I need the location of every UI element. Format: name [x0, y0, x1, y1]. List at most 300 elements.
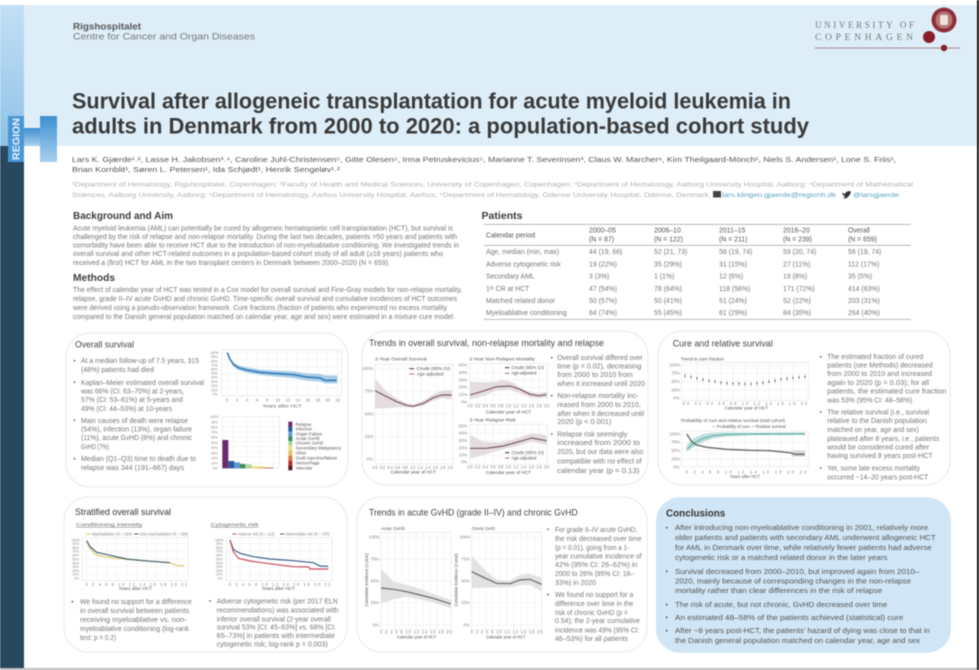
institution name: [73, 22, 255, 42]
patients table: 59 (20, 74): [783, 249, 816, 256]
institution name: Centre for Cancer and Organ Diseases: [73, 32, 255, 42]
text block: GvHD findings: 2000 to 26% (95% CI: 18–: [555, 571, 634, 578]
logo: Region H: REGION: [12, 118, 22, 160]
text block: cytogenetic finding: inferior overall survival (2-year overall: [217, 616, 331, 624]
patients table: 118 (56%): [719, 286, 750, 293]
text block: GvHD findings: We found no support for a: [555, 592, 633, 599]
text block: overall survival findings: was 66% (CI: 63–70%) at 2-years,: [80, 388, 184, 396]
chart: 3-year relapse risk: 30%: [459, 438, 467, 443]
chart: 3-year relapse risk: 0%: [461, 460, 467, 465]
chart: 2-year overall survival: 0%: [367, 457, 373, 462]
text block: GvHD findings: [547, 527, 642, 643]
chart: cytogenetic risk: 70%: [216, 550, 223, 554]
text block: cytogenetic finding: survival 53% [CI: 45–63%] vs. 68% [CI:: [217, 624, 336, 632]
text block: cytogenetic finding: cytogenetic risk; log-rank p = 0.003): [217, 642, 328, 648]
patients table: 2011–15: [719, 228, 745, 234]
chart: 3-year relapse risk: 40%: [459, 431, 467, 436]
chart: conditioning intensity: 30%: [72, 565, 79, 569]
logo: University of Copenhagen: COPENHAGEN: [815, 33, 913, 43]
patients table: 56 (19, 74): [848, 249, 881, 256]
chart: probability of cure and relative survival: 0%: [673, 464, 680, 469]
chart: conditioning intensity: 50%: [72, 557, 79, 561]
text block: overall survival findings: Kaplan–Meier estimated overall survival: [81, 380, 204, 387]
chart: conditioning intensity: 10%: [72, 573, 79, 577]
patients table: Overall: [848, 228, 870, 234]
patients table: 52 (21, 73): [654, 249, 687, 256]
chart: cytogenetic risk: Adverse risk (N = 112): [238, 531, 275, 536]
authors: [72, 155, 896, 174]
chart: cytogenetic risk: 30%: [216, 565, 223, 569]
patients table: 12 (6%): [719, 274, 743, 280]
text block: trend findings: [551, 355, 645, 475]
text block: overall survival findings: 49% (CI: 44–53%) at 10-years: [81, 406, 173, 413]
chart: 2-year non-relapse mortality: 50%: [459, 363, 467, 368]
chart: probability of cure and relative survival: 25%: [671, 456, 680, 461]
chart: probability of cure and relative survival: [669, 418, 808, 479]
patients table: 47 (54%): [589, 286, 617, 293]
chart: 3-year relapse risk: 10%: [459, 453, 467, 458]
text block: trend findings: compatible with no effect of: [557, 458, 642, 466]
patients table: Calendar period: [486, 232, 535, 240]
chart: chronic GvHD: 50%: [461, 578, 470, 583]
text block: GvHD findings: the risk decreased over time: [555, 536, 642, 543]
text block: overall survival findings: At a median follow-up of 7.5 years, 315: [81, 358, 199, 365]
chart: chronic GvHD: 75%: [461, 556, 470, 561]
chart: 2-year overall survival: [362, 357, 454, 475]
panel: trends in GvHD: [357, 497, 647, 652]
background and aim: Background and Aim: [73, 211, 173, 222]
text block: conditioning finding: [71, 599, 192, 642]
text block: GvHD findings: 42% (95% CI: 26–62%) in: [555, 562, 637, 569]
text block: trend findings: reased from 2000 to 2010,: [557, 402, 641, 409]
text block: cytogenetic finding: Adverse cytogenetic risk (per 2017 ELN: [217, 598, 338, 606]
patients table: 414 (63%): [848, 286, 880, 293]
chart: 2-year non-relapse mortality: Calendar year of HCT: [486, 409, 531, 414]
chart: Kaplan-Meier overall survival: 70%: [211, 363, 218, 367]
text block: cure findings: occurred ~14–20 years post-HCT: [827, 474, 929, 482]
patients table: 55 (45%): [654, 310, 682, 317]
text block: conclusions: cytogenetic risk or a matched related donor in the later years: [675, 555, 888, 562]
heading: trends in survival: Trends in overall survival, non-relapse mortality and relapse: [369, 338, 604, 349]
chart: Kaplan-Meier overall survival: 8: [266, 398, 269, 403]
chart: cytogenetic risk: 50%: [216, 557, 223, 561]
chart: trend in cure fraction: Trend in cure fraction: [681, 357, 725, 362]
patients table: 84 (35%): [783, 310, 811, 317]
chart: chronic GvHD: Cumulative incidence (2-year): [453, 553, 458, 607]
patients table: 64 (74%): [589, 310, 617, 317]
chart: 3-year relapse risk: Calendar year of HCT: [486, 470, 531, 475]
chart: trend in cure fraction: 0%: [673, 395, 680, 400]
methods: [72, 273, 462, 321]
chart: 2-year overall survival: Calendar year of HCT: [391, 470, 436, 475]
chart: Kaplan-Meier overall survival: [210, 350, 342, 408]
patients table: 58 (19, 74): [719, 249, 752, 256]
text block: conclusions: for AML in Denmark over time, while relatively fewer patients had adverse: [675, 545, 932, 552]
chart: Kaplan-Meier overall survival: 4: [246, 398, 249, 403]
chart: 2-year overall survival: 75%: [365, 389, 373, 394]
background and aim: Acute myeloid leukemia (AML) can potentially be cured by allogeneic hematopoietic cell transplantation (HCT), but survival is: [73, 226, 454, 232]
chart: cytogenetic risk: 80%: [216, 546, 223, 550]
text block: trend findings: time (p = 0.02), decreasing: [557, 364, 641, 370]
text block: trend findings: Relapse risk seemingly: [557, 432, 628, 438]
chart: trend in cure fraction: Calendar year of HCT: [725, 405, 768, 410]
chart: 2-year overall survival: 100%: [362, 366, 373, 371]
chart: trend in cure fraction: 75%: [671, 371, 680, 376]
text block: cure findings: The relative survival (i.e., survival: [827, 410, 929, 416]
chart: trend in cure fraction: 25%: [671, 387, 680, 392]
affiliations and contact: Sciences, Aalborg University, Aalborg; ⁵Department of Hematology, Aarhus University Hospital, Aarhus; ⁶Department of Hematology, Odense University Hospital, Odense, Denmark.: [72, 192, 711, 199]
chart: Kaplan-Meier overall survival: 22: [335, 398, 341, 403]
text block: cure findings: was 53% (95% CI: 48–58%).: [826, 398, 914, 404]
affiliations and contact: lars.klingen.gjaerde@regionh.dk: [722, 192, 837, 199]
patients table: 50 (57%): [589, 298, 617, 305]
chart: 2-year non-relapse mortality: 30%: [459, 377, 467, 382]
chart: causes of death: [210, 415, 342, 471]
background and aim: overall survival and other HCT-related outcomes in a population-based cohort study of all adult (≥18 years) patients who: [73, 251, 443, 258]
text block: cure findings: from 2000 to 2010 and increased: [827, 371, 932, 378]
chart: Kaplan-Meier overall survival: 20: [325, 398, 331, 403]
patients table: (N = 239): [783, 236, 812, 244]
chart: Kaplan-Meier overall survival: 100%: [210, 351, 219, 355]
methods: compared to the Danish general population matched on calendar year, age and sex) were estimated in a mixture cure model.: [73, 314, 455, 321]
legend: causes of death: Chronic GvHD: [296, 441, 324, 446]
chart: conditioning intensity: 100%: [71, 538, 80, 542]
text block: GvHD findings: 0.54); the 2-year cumulative: [555, 618, 640, 625]
text block: trend findings: calendar year (p = 0.13): [557, 468, 639, 475]
heading: cure and relative survival: Cure and relative survival: [673, 339, 773, 350]
chart: 3-year relapse risk: 50%: [459, 423, 467, 428]
text block: conclusions: older patients and patients with secondary AML underwent allogeneic HCT: [675, 535, 937, 542]
title: Survival after allogeneic transplantation for acute myeloid leukemia in: [72, 88, 791, 114]
text block: overall survival findings: Main causes of death were relapse: [81, 418, 188, 425]
text block: trend findings: when it increased until 2020: [556, 381, 645, 388]
chart: cytogenetic risk: Intermediate risk (N = 370): [286, 531, 330, 536]
logo: University of Copenhagen: UNIVERSITY OF: [815, 20, 914, 30]
chart: 2-year non-relapse mortality: Age-adjusted: [511, 371, 537, 376]
text block: trend findings: after when it decreased until: [557, 411, 644, 418]
chart: trend in cure fraction: 00 02 04 06 08 10 12 14 16 18 20: [683, 401, 808, 406]
text block: overall survival findings: (11%), acute GvHD (8%) and chronic: [81, 435, 193, 442]
chart: Kaplan-Meier overall survival: 30%: [211, 380, 218, 384]
text block: overall survival findings: relapse was 344 (191–667) days: [81, 465, 185, 472]
chart: conditioning intensity: 40%: [72, 561, 79, 565]
chart: acute GvHD: 50%: [371, 578, 379, 583]
logo: University of Copenhagen: [815, 8, 960, 51]
patients table: 35 (29%): [654, 262, 682, 268]
legend: causes of death: Relapse: [296, 422, 312, 427]
page edge: [977, 0, 979, 670]
legend: causes of death: Hemorrhage: [296, 461, 320, 466]
affiliations and contact: @larsgjaerde: [853, 192, 899, 199]
chart: cytogenetic risk: Years after HCT: [262, 586, 295, 591]
chart: conditioning intensity: Non-myeloablative (N = 395): [140, 531, 189, 536]
chart: acute GvHD: [364, 526, 453, 639]
chart: causes of death: 60%: [211, 436, 218, 440]
text block: trend findings: 2020 (p < 0.001): [557, 419, 611, 426]
patients table: Secondary AML: [486, 274, 535, 280]
chart: 2-year non-relapse mortality: 10%: [459, 392, 467, 397]
patients table: 44 (19, 66): [589, 249, 622, 256]
chart: cytogenetic risk: 40%: [216, 561, 223, 565]
chart: Kaplan-Meier overall survival: 14: [295, 398, 301, 403]
chart: acute GvHD: Acute GvHD: [381, 526, 405, 531]
chart: causes of death: 0%: [213, 467, 218, 471]
background and aim: received a (first) HCT for AML in the two transplant centers in Denmark between 2000–2020 (N = 659).: [73, 260, 390, 267]
chart: probability of cure and relative survival: — Probability of cure — Relative survival: [712, 424, 786, 429]
chart: causes of death: 90%: [211, 420, 218, 424]
chart: 2-year overall survival: 25%: [365, 434, 373, 439]
text block: overall survival findings: Median (Q1–Q3) time to death due to: [81, 456, 196, 463]
legend: causes of death: [288, 422, 342, 471]
chart: Kaplan-Meier overall survival: 80%: [211, 359, 218, 363]
chart: Kaplan-Meier overall survival: Years after HCT: [262, 403, 302, 408]
patients table: 27 (11%): [783, 262, 810, 268]
chart: Kaplan-Meier overall survival: 18: [315, 398, 321, 403]
patients table: Age, median (min, max): [486, 249, 559, 256]
text block: GvHD findings: incidence was 49% (95% CI:: [555, 628, 639, 634]
heading: trends in GvHD: Trends in acute GvHD (grade II–IV) and chronic GvHD: [369, 508, 578, 519]
chart: conditioning intensity: 80%: [72, 546, 79, 550]
chart: trend in cure fraction: 50%: [671, 379, 680, 384]
chart: Kaplan-Meier overall survival: 20%: [211, 384, 218, 388]
chart: conditioning intensity: 90%: [72, 542, 79, 546]
chart: conditioning intensity: 0 2 4 6 8 10 12 14 16 18 20 22: [85, 582, 188, 587]
chart: acute GvHD: 0 2 4 6 8 10 12 14 16 18 20: [380, 630, 453, 635]
chart: Kaplan-Meier overall survival: 2: [236, 398, 239, 403]
patients table: (N = 211): [719, 236, 747, 244]
text block: conclusions: mortality rather than clear differences in the risk of relapse: [675, 588, 882, 595]
text block: trend findings: Overall survival differed over: [557, 355, 643, 362]
chart: trend in cure fraction: [669, 357, 808, 410]
chart: 3-year relapse risk: Age-adjusted: [511, 455, 537, 460]
patients table: Patients: [482, 211, 523, 222]
chart: chronic GvHD: Chronic GvHD: [472, 526, 495, 531]
patients table: 52 (22%): [783, 298, 811, 305]
chart: Kaplan-Meier overall survival: 6: [256, 398, 259, 403]
sidebar: [0, 5, 24, 668]
chart: conditioning intensity: 20%: [72, 569, 79, 573]
chart: causes of death: 30%: [211, 451, 218, 455]
chart: 2-year non-relapse mortality: 0%: [461, 399, 467, 404]
chart: 3-year relapse risk: [459, 417, 550, 475]
bottom edge: [0, 668, 977, 670]
chart: conditioning intensity: Myeloablative (N = 264): [92, 531, 132, 536]
chart: conditioning intensity: Conditioning intensity: [76, 522, 143, 527]
text block: cure findings: having survived 8 years post-HCT: [827, 453, 933, 460]
text block: GvHD findings: For grade II–IV acute GvHD,: [555, 527, 637, 534]
chart: 3-year relapse risk: 00 02 04 06 08 10 12 14 16 18 20: [467, 464, 550, 469]
chart: conditioning intensity: 60%: [72, 554, 79, 558]
patients table: 2000–05: [589, 228, 616, 234]
panel: conclusions: [656, 497, 951, 653]
chart: 3-year relapse risk: 3-Year Relapse Risk: [469, 417, 517, 422]
text block: trend findings: Non-relapse mortality inc-: [557, 393, 639, 400]
logo: Region H: [8, 116, 57, 162]
text block: conclusions: The risk of acute, but not chronic, GvHD decreased over time: [675, 602, 887, 609]
patients table: Myeloablative conditioning: [486, 310, 567, 317]
chart: Kaplan-Meier overall survival: 0%: [213, 392, 218, 396]
patients table: 1 (1%): [654, 274, 674, 280]
heading: conclusions: Conclusions: [666, 509, 726, 520]
chart: 2-year non-relapse mortality: 00 02 04 06 08 10 12 14 16 18 20: [467, 404, 550, 409]
patients table: (N = 122): [654, 236, 683, 244]
text block: overall survival findings: (54%), infection (13%), organ failure: [81, 426, 192, 434]
text block: cure findings: matched on year, age and sex): [827, 427, 919, 434]
chart: causes of death: 100%: [210, 415, 219, 419]
chart: acute GvHD: Cumulative incidence (1-year): [364, 553, 369, 607]
chart: 3-year relapse risk: 20%: [459, 445, 467, 450]
chart: causes of death: 70%: [211, 431, 218, 435]
patients table: [482, 211, 911, 320]
patients table: 3 (3%): [589, 274, 609, 280]
chart: acute GvHD: 0%: [373, 622, 379, 627]
patients table: 61 (29%): [719, 310, 747, 317]
chart: cytogenetic risk: 100%: [215, 538, 224, 542]
chart: probability of cure and relative survival: Years after HCT: [730, 474, 760, 479]
chart: 2-year overall survival: Age-adjusted: [417, 371, 444, 376]
text block: overall survival findings: [74, 358, 204, 472]
panel: stratified overall survival: [64, 497, 347, 652]
chart: conditioning intensity: 0%: [74, 577, 79, 581]
chart: probability of cure and relative survival: 50%: [671, 448, 680, 453]
text block: trend findings: increased from 2000 to: [557, 440, 640, 447]
chart: 2-year overall survival: 00 02 04 06 08 10 12 14 16 18 20: [372, 465, 454, 470]
text block: conclusions: Survival decreased from 2000–2010, but improved again from 2010–: [675, 569, 919, 576]
chart: acute GvHD: 75%: [371, 556, 379, 561]
methods: The effect of calendar year of HCT was tested in a Cox model for overall survival and Fine-Gray models for non-relapse mortality,: [73, 287, 462, 294]
chart: Kaplan-Meier overall survival: 60%: [211, 368, 218, 372]
chart: probability of cure and relative survival: 100%: [669, 431, 681, 436]
chart: Kaplan-Meier overall survival: 10: [275, 398, 281, 403]
chart: acute GvHD: 100%: [369, 535, 380, 540]
chart: Kaplan-Meier overall survival: 10%: [211, 388, 218, 392]
chart: chronic GvHD: 25%: [461, 600, 470, 605]
chart: 2-year non-relapse mortality: 20%: [459, 385, 467, 390]
heading: stratified overall survival: Stratified overall survival: [75, 507, 171, 518]
text block: cure findings: [820, 354, 947, 482]
patients table: 2016–20: [783, 228, 810, 234]
chart: 2-year overall survival: 2-Year Overall Survival: [375, 357, 427, 362]
chart: acute GvHD: 25%: [371, 600, 379, 605]
text block: cytogenetic finding: 65–73%] in patients with intermediate: [217, 633, 335, 640]
panel: overall survival: [66, 333, 348, 487]
chart: chronic GvHD: 0%: [463, 622, 470, 627]
patients table: (N = 659): [848, 236, 877, 244]
chart: 3-year relapse risk: Crude (95% CI): [511, 450, 545, 455]
chart: probability of cure and relative survival: 75%: [671, 440, 680, 445]
chart: Kaplan-Meier overall survival: 40%: [211, 376, 218, 380]
patients table: 19 (8%): [783, 274, 807, 280]
chart: chronic GvHD: 100%: [459, 535, 471, 540]
chart: probability of cure and relative survival: Probability of cure and relative survival (total cohort): [681, 418, 786, 423]
legend: causes of death: Other: [296, 451, 307, 456]
chart: Kaplan-Meier overall survival: 50%: [211, 372, 218, 376]
chart: chronic GvHD: 0 2 4 6 8 10 12 14 16 18 20: [471, 630, 543, 635]
text block: conditioning finding: test: p = 0.2): [80, 635, 116, 642]
chart: probability of cure and relative survival: 0 2 4 6 8 10 12 14 16 18 20 22: [685, 469, 807, 474]
chart: cytogenetic risk: 0 2 4 6 8 10 12 14 16 18 20 22: [229, 582, 331, 587]
text block: cure findings: patients, the estimated cure fraction: [827, 388, 947, 396]
patients table: Adverse cytogenetic risk: [486, 262, 561, 268]
text block: conditioning finding: receiving myeloablative vs. non-: [80, 617, 187, 624]
patients table: 51 (24%): [719, 298, 747, 305]
patients table: 264 (40%): [848, 310, 880, 317]
legend: causes of death: Vascular: [296, 466, 313, 471]
chart: 2-year non-relapse mortality: 40%: [459, 370, 467, 375]
legend: causes of death: Secondary Malignancy: [296, 446, 342, 451]
chart: causes of death: 50%: [211, 441, 218, 445]
methods: were derived using a pseudo-observation framework. Cure fractions (fraction of patients who experienced no excess mortality: [72, 305, 448, 312]
chart: causes of death: 20%: [211, 456, 218, 460]
patients table: 1ˢᵗ CR at HCT: [486, 286, 530, 293]
panel: trends in overall survival: [362, 331, 648, 485]
text block: trend findings: from 2000 to 2010 from: [557, 372, 633, 379]
text block: GvHD findings: (p = 0.01), going from a 1-: [555, 545, 629, 552]
text block: conditioning finding: in overall survival between patients: [80, 608, 190, 615]
legend: causes of death: Graft rejection/failure: [296, 456, 338, 461]
text block: trend findings: 2020, but our data were also: [557, 449, 643, 456]
chart: Kaplan-Meier overall survival: 16: [305, 398, 311, 403]
chart: 2-year overall survival: 50%: [365, 411, 373, 416]
patients table: 171 (72%): [783, 286, 815, 293]
patients table: 203 (31%): [848, 298, 880, 305]
text block: GvHD findings: 46–53%) for all patients: [555, 636, 629, 643]
text block: overall survival findings: 57% (CI: 53–61%) at 5-years and: [81, 397, 183, 404]
background and aim: challenged by the risk of relapse and non-relapse mortality. During the last two decades, patients >50 years and patients with: [73, 234, 457, 241]
title: adults in Denmark from 2000 to 2020: a population-based cohort study: [72, 114, 810, 138]
text block: GvHD findings: risk of chronic GvHD (p =: [555, 610, 628, 617]
methods: relapse, grade II–IV acute GvHD and chronic GvHD. Time-specific overall survival and cumulative incidences of HCT outcomes: [73, 296, 458, 303]
patients table: 2006–10: [654, 228, 681, 234]
panel: cure and relative survival: [658, 331, 950, 485]
text block: conclusions: [666, 525, 937, 645]
chart: 2-year non-relapse mortality: [459, 357, 550, 414]
chart: chronic GvHD: Calendar year of HCT: [486, 634, 526, 639]
chart: causes of death: 10%: [211, 462, 218, 466]
text block: conditioning finding: myeloablative conditioning (log-rank: [80, 626, 190, 633]
heading: overall survival: Overall survival: [75, 339, 134, 350]
text block: cure findings: plateaued after 8 years, i.e., patients: [827, 436, 940, 443]
chart: causes of death: 80%: [211, 425, 218, 429]
chart: acute GvHD: Calendar year of HCT: [397, 634, 437, 639]
patients table: Matched related donor: [486, 298, 556, 305]
affiliations and contact: ¹Department of Hematology, Rigshospitalet, Copenhagen; ²Faculty of Health and Medical Sciences, University of Copenhagen, Copenhagen; ³Department of Hematology, Aalborg University Hospital, Aalborg; ⁴Department of Mathematical: [72, 182, 914, 188]
chart: chronic GvHD: [453, 526, 543, 639]
chart: cytogenetic risk: 20%: [216, 569, 223, 573]
chart: cytogenetic risk: 10%: [216, 573, 223, 577]
title: [72, 88, 810, 138]
text block: conclusions: An estimated 48–58% of the patients achieved (statistical) cure: [675, 615, 903, 622]
chart: trend in cure fraction: 100%: [669, 362, 681, 367]
chart: causes of death: 40%: [211, 446, 218, 450]
patients table: 19 (22%): [589, 262, 617, 268]
text block: conclusions: After introducing non-myeloablative conditioning in 2001, relatively more: [675, 525, 928, 532]
text block: cure findings: relative to the Danish population: [827, 418, 927, 425]
legend: causes of death: Acute GvHD: [296, 436, 320, 441]
chart: 2-year non-relapse mortality: Crude (95% CI): [511, 365, 545, 370]
text block: cure findings: Yet, some late excess mortality: [827, 466, 921, 472]
text block: conclusions: After ~8 years post-HCT, the patients’ hazard of dying was close to that in: [675, 628, 930, 635]
background and aim: comorbidity have been able to receive HCT due to the introduction of non-myeloablative conditioning. We investigated trends in: [73, 242, 459, 250]
chart: 2-year overall survival: Crude (95% CI): [417, 366, 451, 371]
chart: cytogenetic risk: Cytogenetic risk: [211, 522, 260, 527]
patients table: 31 (15%): [719, 262, 747, 268]
text block: cure findings: The estimated fraction of cured: [827, 354, 923, 361]
legend: causes of death: Organ Failure: [296, 431, 323, 436]
text block: overall survival findings: GvHD (7%): [81, 444, 109, 451]
affiliations and contact: [72, 182, 914, 199]
methods: Methods: [73, 273, 115, 284]
